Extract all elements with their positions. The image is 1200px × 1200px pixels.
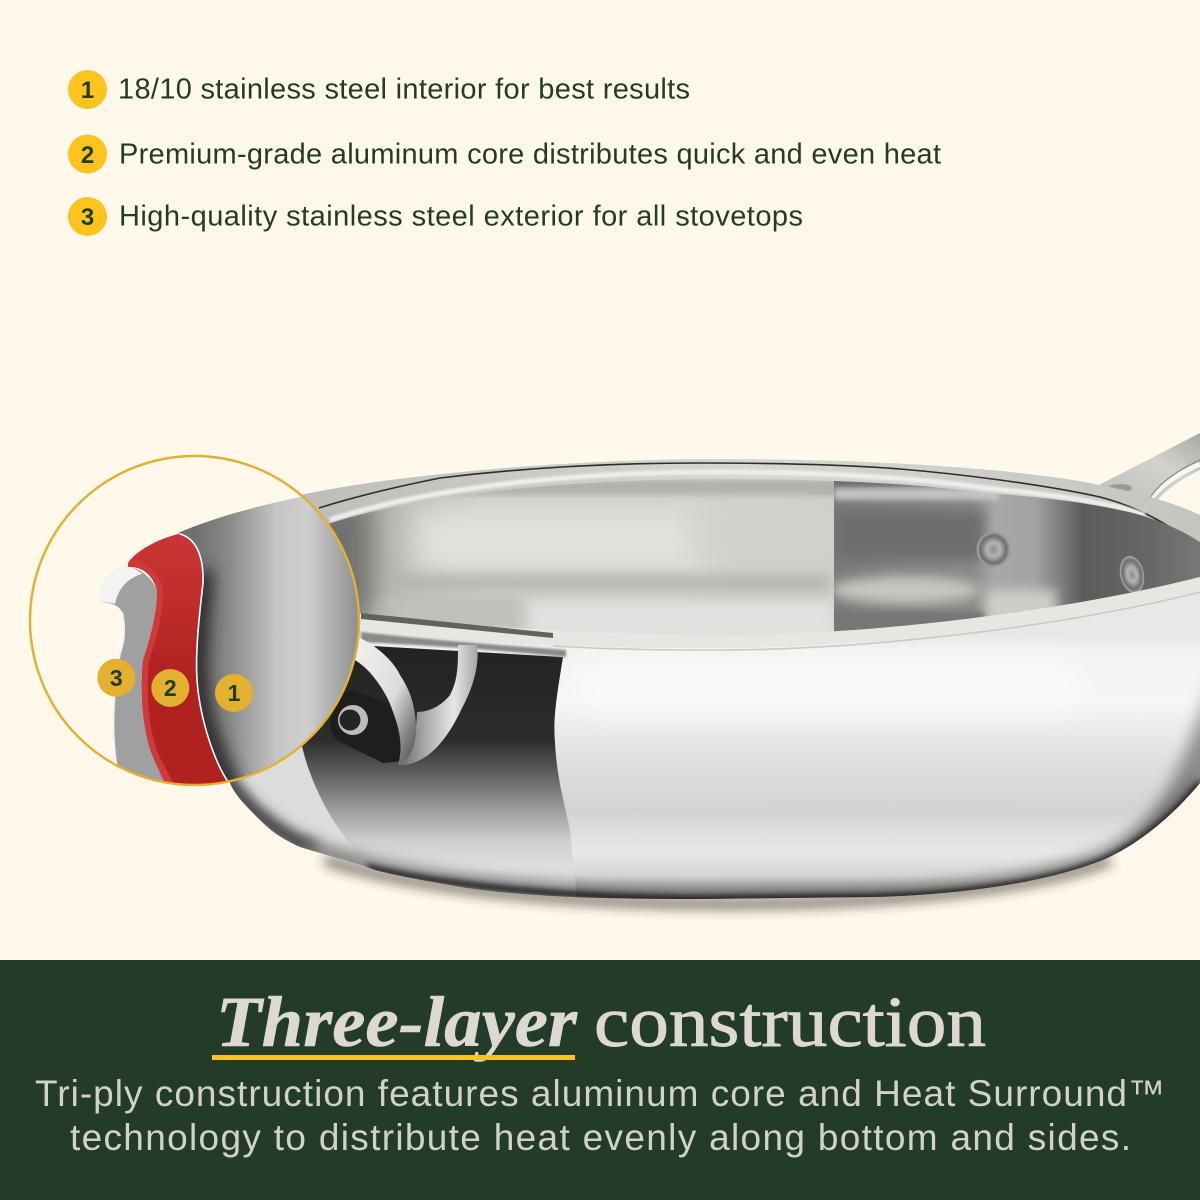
handle right arm: [398, 645, 478, 765]
feature 2: 2: [81, 142, 94, 169]
magnified layers: [100, 497, 358, 784]
magnifier callout: [28, 454, 360, 786]
description: Tri-ply construction features aluminum core and Heat Surround™: [35, 1073, 1165, 1114]
feature 3: 3: [81, 204, 94, 231]
layer badge 1: 1: [228, 680, 241, 706]
title: [216, 982, 986, 1062]
front rim highlight: [361, 577, 1200, 657]
pan illustration: [30, 433, 1200, 910]
title: Three-layer: [216, 982, 578, 1062]
title underline: [212, 1055, 575, 1060]
pan rim: [300, 459, 1200, 625]
interior dark reflection: [834, 481, 1200, 632]
magnifier ring: [30, 456, 359, 785]
banner: [0, 960, 1200, 1200]
layer badge 3: 3: [110, 665, 123, 691]
long handle: [1097, 433, 1200, 505]
feature 1: 1: [81, 77, 94, 104]
layer badge 2: [151, 669, 189, 707]
layer badge 1: [215, 674, 253, 712]
aluminum core layer: [128, 534, 226, 784]
feature 3: High-quality stainless steel exterior for all stovetops: [119, 200, 803, 232]
handle left arm: [355, 638, 416, 765]
magnifier disc: [30, 456, 359, 785]
description: technology to distribute heat evenly along bottom and sides.: [70, 1117, 1131, 1158]
side helper handle: [330, 638, 478, 765]
description: [35, 1073, 1165, 1158]
layer badge 2: 2: [164, 675, 177, 701]
interior steel layer: [178, 497, 358, 781]
interior rivets: [976, 532, 1148, 596]
handle mounting plate: [330, 690, 412, 763]
feature 2: Premium-grade aluminum core distributes quick and even heat: [119, 138, 941, 170]
pan shadow: [325, 860, 1110, 904]
layer badge 3: [97, 659, 135, 697]
feature 1: 18/10 stainless steel interior for best results: [118, 74, 690, 106]
feature list: [68, 70, 941, 236]
title: construction: [594, 982, 986, 1062]
outer steel layer: [100, 566, 168, 786]
handle rivet: [338, 705, 368, 735]
pan body: [200, 590, 1200, 910]
pan interior: [329, 479, 1200, 635]
